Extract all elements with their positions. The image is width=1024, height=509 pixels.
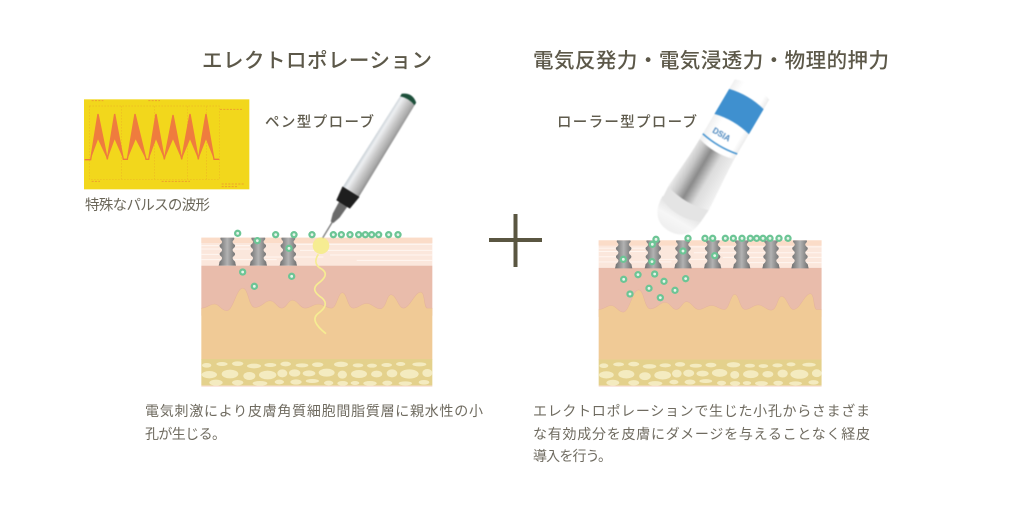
heading: electric repulsion, permeation and physical pressure: 電気反発力・電気浸透力・物理的押力 [533, 50, 889, 72]
description: right [533, 403, 870, 464]
plus sign [489, 214, 542, 267]
description: right: な有効成分を皮膚にダメージを与えることなく経皮 [533, 426, 870, 442]
icon: pen probe [314, 90, 419, 243]
label: pen probe: ペン型プローブ [265, 113, 374, 131]
skin diagram: left [201, 230, 432, 387]
description: left: 孔が生じる。 [145, 426, 226, 442]
oscilloscope pulse waveform image [84, 99, 249, 189]
skin diagram: right [599, 235, 822, 387]
label: roller probe: ローラー型プローブ [557, 113, 698, 131]
icon: roller probe [649, 74, 775, 243]
description: left: 電気刺激により皮膚角質細胞間脂質層に親水性の小 [145, 403, 483, 419]
active ingredient particles [234, 230, 402, 290]
electric stimulus path [313, 237, 329, 334]
description: right: エレクトロポレーションで生じた小孔からさまざま [533, 403, 870, 419]
icon: roller probe: DSIA [711, 126, 732, 144]
description: right: 導入を行う。 [533, 448, 612, 464]
caption: special pulse waveform: 特殊なパルスの波形 [85, 197, 210, 214]
description: left [145, 403, 483, 442]
active ingredient particles [620, 235, 792, 301]
pores in the skin barrier [219, 238, 297, 266]
pores in the skin barrier [615, 240, 809, 268]
heading: electroporation: エレクトロポレーション [202, 50, 432, 72]
